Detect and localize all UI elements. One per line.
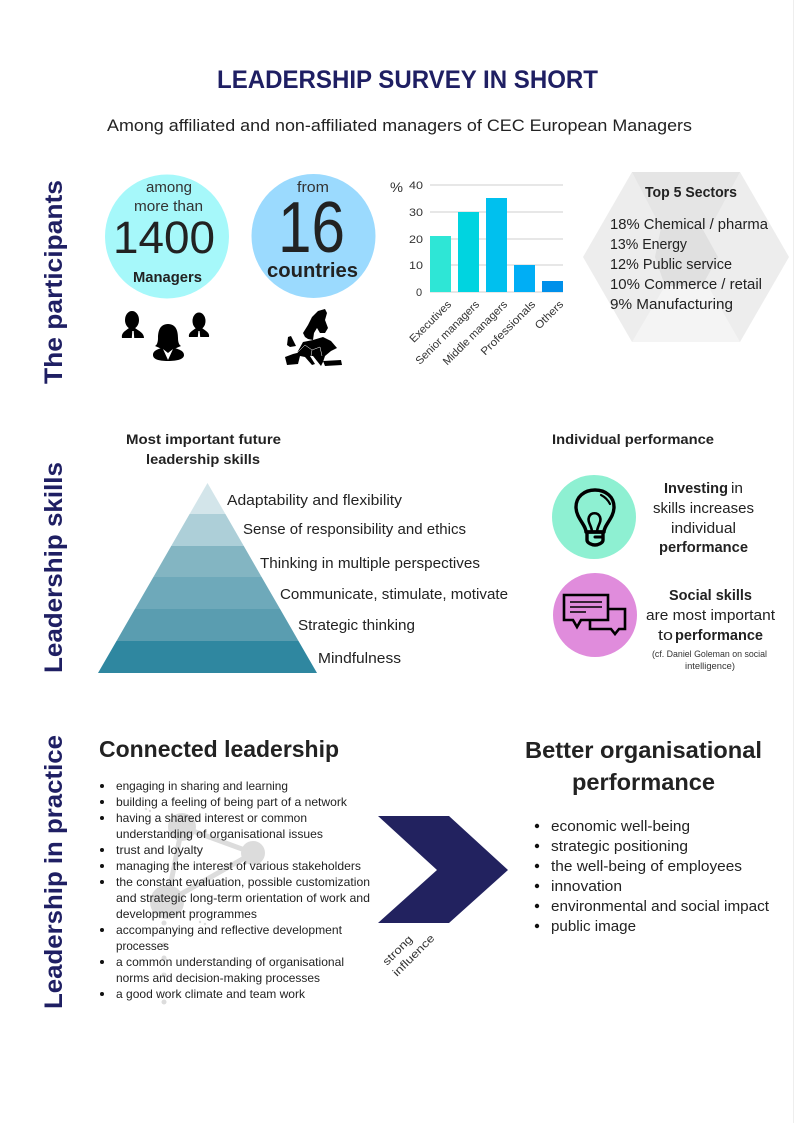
arrow label: strong influence — [381, 932, 437, 979]
heading: most important future leadership skills: leadership skills — [146, 451, 260, 467]
list: connected leadership: norms and decision-making processes — [116, 971, 320, 985]
bar chart: Others — [533, 298, 566, 332]
section label: leadership skills: Leadership skills — [40, 462, 68, 673]
list: connected leadership: the constant evaluation, possible customization — [116, 875, 370, 889]
pyramid labels: Strategic thinking — [298, 618, 415, 634]
section label: leadership in practice: Leadership in practice — [40, 735, 68, 1009]
list: organisational performance: the well-being of employees — [551, 859, 742, 875]
bar chart: 40 — [409, 180, 423, 192]
text: investing in skills — [653, 481, 754, 556]
list: organisational performance — [535, 819, 769, 935]
pyramid labels: Communicate, stimulate, motivate — [280, 587, 508, 603]
panel: top 5 sectors hexagon: 13% Energy — [610, 236, 687, 253]
panel: top 5 sectors hexagon: 18% Chemical / pharma — [610, 216, 769, 233]
heading: most important future leadership skills: Most important future — [126, 431, 281, 447]
bar chart: Senior managers — [414, 298, 482, 367]
title: LEADERSHIP SURVEY IN SHORT — [217, 66, 598, 94]
pyramid labels: Sense of responsibility and ethics — [243, 522, 466, 538]
list: connected leadership: understanding of organisational issues — [116, 827, 323, 841]
heading: individual performance: Individual performance — [552, 431, 714, 447]
bar chart: Middle managers — [441, 298, 510, 368]
list: connected leadership: development programmes — [116, 907, 257, 921]
text: investing in skills: skills increases — [653, 501, 754, 517]
pyramid labels: Thinking in multiple perspectives — [260, 556, 480, 572]
list: organisational performance: public image — [551, 919, 636, 935]
list: connected leadership: trust and loyalty — [116, 843, 203, 857]
panel: countries circle: 16 — [278, 188, 345, 268]
list: connected leadership — [100, 779, 370, 1001]
panel: top 5 sectors hexagon: Top 5 Sectors — [645, 184, 737, 201]
text: social skills: (cf. Daniel Goleman on social — [652, 649, 767, 659]
subtitle: Among affiliated and non-affiliated managers of CEC European Managers — [107, 116, 692, 135]
list: connected leadership: a common understanding of organisational — [116, 955, 344, 969]
list: organisational performance: strategic positioning — [551, 839, 688, 855]
icon: managers group — [122, 311, 209, 361]
list: connected leadership: engaging in sharing and learning — [116, 779, 288, 793]
text: investing in skills: performance — [659, 540, 748, 556]
panel: top 5 sectors hexagon: 9% Manufacturing — [610, 296, 733, 313]
heading: connected leadership: Connected leadership — [99, 736, 339, 762]
heading: better organisational performance — [525, 737, 762, 795]
panel: top 5 sectors hexagon: 12% Public service — [610, 256, 732, 273]
list: connected leadership: and strategic long-term orientation of work and — [116, 891, 370, 905]
panel: managers circle: among — [146, 180, 192, 196]
text: investing in skills: Investing — [664, 481, 728, 497]
text: social skills: to — [658, 628, 673, 644]
icon: light bulb — [552, 475, 636, 559]
icon: map of Europe — [285, 309, 342, 366]
section label: the participants: The participants — [40, 180, 68, 384]
bar chart: 30 — [409, 207, 423, 219]
panel: top 5 sectors hexagon — [583, 172, 789, 342]
list: connected leadership: managing the interest of various stakeholders — [116, 859, 361, 873]
arrow: chevron — [378, 816, 508, 923]
arrow label: strong influence: strong — [381, 933, 415, 968]
list: connected leadership: having a shared interest or common — [116, 811, 307, 825]
bar chart: % — [390, 179, 403, 195]
list: connected leadership: accompanying and reflective development — [116, 923, 343, 937]
list: organisational performance: environmental and social impact — [551, 899, 769, 915]
pyramid chart — [98, 483, 317, 673]
pyramid labels — [227, 493, 508, 667]
bar chart: 20 — [409, 234, 423, 246]
list: connected leadership: building a feeling of being part of a network — [116, 795, 348, 809]
heading: better organisational performance: Better organisational — [525, 737, 762, 763]
panel: managers circle: more than — [134, 199, 203, 215]
pyramid labels: Mindfulness — [318, 651, 401, 667]
text: social skills: are most important — [646, 608, 775, 624]
panel: countries circle — [252, 174, 376, 298]
text: social skills — [646, 588, 775, 671]
icon: speech bubbles — [553, 573, 637, 657]
text: social skills: Social skills — [669, 588, 752, 604]
text: social skills: intelligence) — [685, 661, 735, 671]
pyramid labels: Adaptability and flexibility — [227, 493, 403, 509]
bar chart: Executives — [407, 298, 454, 345]
panel: countries circle: countries — [267, 260, 358, 282]
text: investing in skills: individual — [671, 521, 736, 537]
list: organisational performance: innovation — [551, 879, 622, 895]
list: connected leadership: processes — [116, 939, 169, 953]
bar chart: Professionals — [479, 298, 538, 358]
bar chart — [390, 179, 566, 368]
arrow label: strong influence: influence — [391, 932, 437, 979]
panel: managers circle — [105, 174, 229, 298]
heading: better organisational performance: performance — [572, 769, 715, 795]
panel: countries circle: from — [297, 180, 329, 196]
bar chart: 10 — [409, 260, 423, 272]
background network graphic — [145, 808, 265, 1004]
text: social skills: performance — [675, 628, 763, 644]
heading: most important future leadership skills — [126, 431, 281, 467]
list: organisational performance: economic well-being — [551, 819, 690, 835]
panel: managers circle: 1400 — [113, 212, 215, 263]
panel: top 5 sectors hexagon: 10% Commerce / retail — [610, 276, 762, 293]
bar chart: 0 — [416, 287, 422, 299]
list: connected leadership: a good work climate and team work — [116, 987, 306, 1001]
panel: managers circle: Managers — [133, 270, 202, 286]
text: investing in skills: in — [731, 481, 743, 497]
